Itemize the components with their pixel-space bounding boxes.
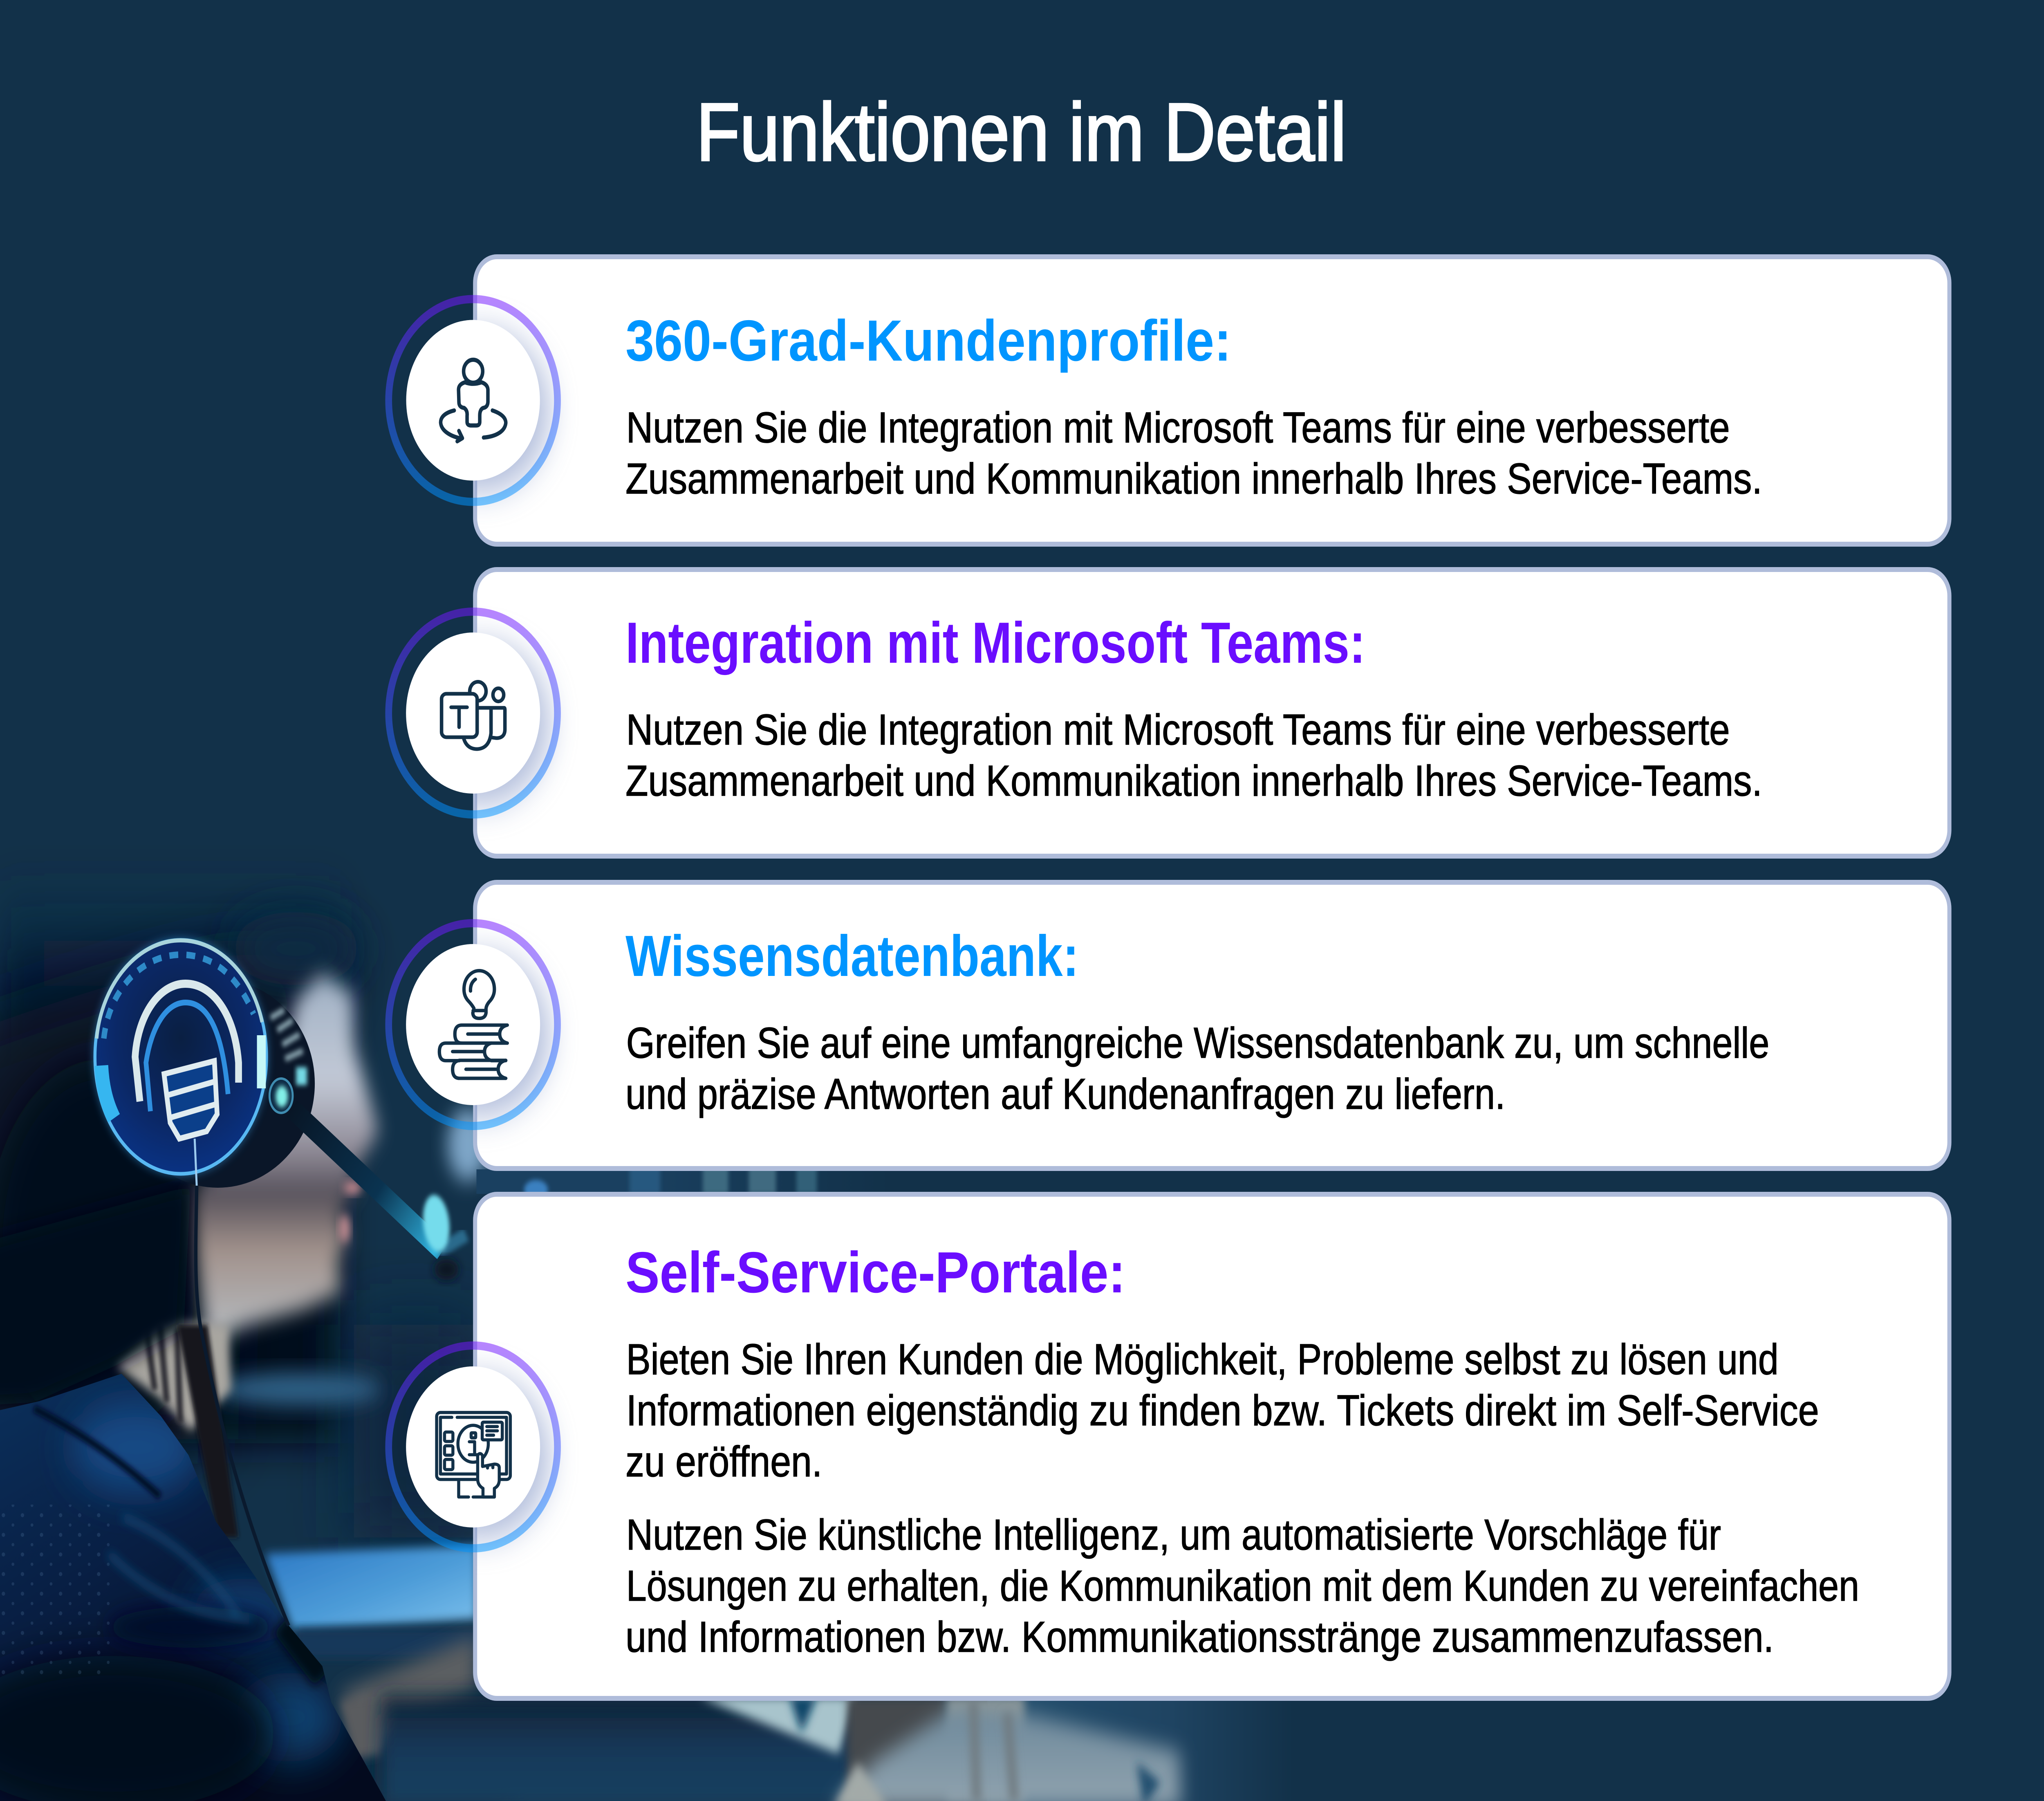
panel: Integration mit Microsoft Teams [389, 570, 1950, 856]
photo: agent with headset [0, 871, 1293, 1801]
icon badge: self-service kiosk [389, 1346, 558, 1548]
body paragraph two: und Informationen bzw. Kommunikationsstränge zusammenzufassen. [625, 1613, 1774, 1661]
body paragraph two: Lösungen zu erhalten, die Kommunikation mit dem Kunden zu vereinfachen [626, 1561, 1859, 1610]
heading: 360-Grad-Kundenprofile: [625, 308, 1231, 373]
body paragraph two: Nutzen Sie künstliche Intelligenz, um automatisierte Vorschläge für [626, 1510, 1721, 1559]
body paragraph two [625, 1510, 1859, 1661]
heading: Self-Service-Portale: [625, 1240, 1125, 1305]
jacket [0, 1366, 408, 1801]
body text: Greifen Sie auf eine umfangreiche Wissensdatenbank zu, um schnelle [626, 1018, 1769, 1067]
panel: Wissensdatenbank [389, 882, 1950, 1169]
body text: und präzise Antworten auf Kundenanfragen zu liefern. [625, 1070, 1505, 1118]
card background [475, 1194, 1950, 1698]
heading: Integration mit Microsoft Teams: [625, 610, 1365, 675]
body text [625, 403, 1762, 503]
body paragraph one [625, 1335, 1819, 1486]
panel: Self-Service-Portale [389, 1194, 1950, 1698]
body text: Zusammenarbeit und Kommunikation innerhalb Ihres Service-Teams. [625, 756, 1762, 805]
body paragraph one: Informationen eigenständig zu finden bzw. Tickets direkt im Self-Service [626, 1386, 1819, 1435]
icon badge: Teams logo [389, 612, 558, 814]
body paragraph one: Bieten Sie Ihren Kunden die Möglichkeit, Probleme selbst zu lösen und [626, 1335, 1779, 1384]
body text [625, 1018, 1769, 1118]
body text [625, 705, 1762, 805]
body paragraph one: zu eröffnen. [625, 1437, 822, 1486]
heading: Wissensdatenbank: [625, 924, 1079, 988]
card background [475, 570, 1950, 856]
headset [94, 939, 466, 1626]
card background [475, 257, 1950, 544]
body text: Nutzen Sie die Integration mit Microsoft Teams für eine verbesserte [626, 705, 1730, 754]
title: Funktionen im Detail [696, 86, 1346, 177]
body text: Zusammenarbeit und Kommunikation innerhalb Ihres Service-Teams. [625, 454, 1762, 503]
body text: Nutzen Sie die Integration mit Microsoft Teams für eine verbesserte [626, 403, 1730, 452]
card background [475, 882, 1950, 1169]
panel: 360-Grad-Kundenprofile [389, 257, 1950, 544]
icon badge: customer profile [389, 299, 558, 502]
icon badge: light bulb on books [389, 923, 558, 1126]
